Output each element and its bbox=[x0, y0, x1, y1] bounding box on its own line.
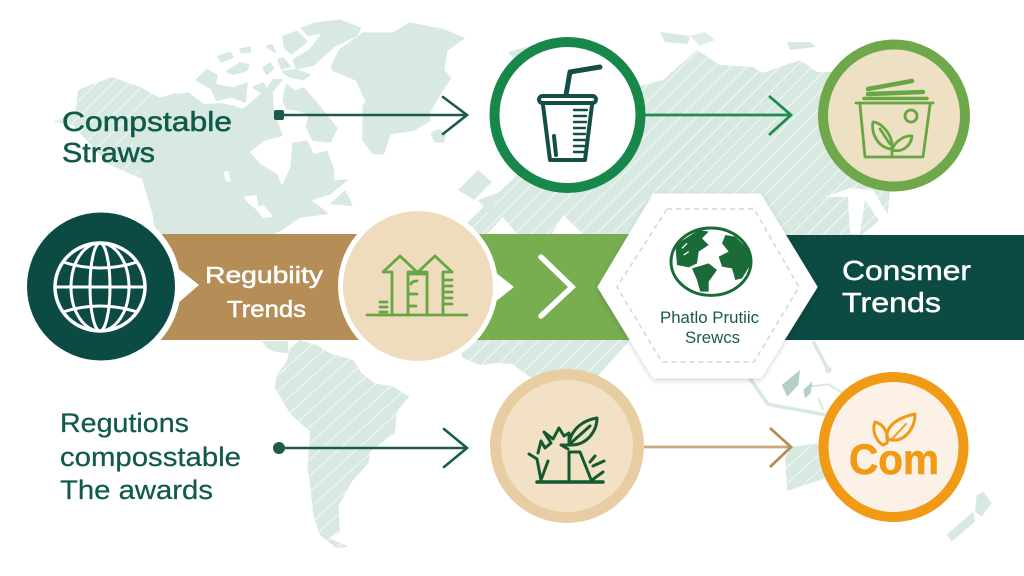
row label: Regutions: The awards bbox=[60, 475, 213, 505]
icon: earth bbox=[671, 228, 751, 295]
band text: Regubiity bbox=[205, 262, 324, 288]
arrow: top left bbox=[274, 97, 467, 134]
row label: Regutions: Regutions bbox=[60, 408, 189, 438]
globe badge bbox=[21, 206, 199, 366]
row label: Regutions: composstable bbox=[60, 442, 241, 472]
band text: Consmer bbox=[842, 255, 971, 286]
icon: plant sprout bbox=[529, 418, 604, 482]
chevron bbox=[541, 257, 572, 316]
arrow: bottom right bbox=[644, 428, 791, 467]
hexagon text: Phatlo Prutiic bbox=[660, 308, 759, 327]
icon circle: compost bin bbox=[823, 44, 965, 186]
icon: cup bbox=[539, 67, 600, 160]
map: cutouts bbox=[487, 188, 888, 234]
hexagon text bbox=[660, 308, 759, 347]
icon circle: straw cup bbox=[494, 42, 640, 188]
band text bbox=[842, 255, 971, 318]
map: Africa bbox=[455, 340, 630, 377]
map: Eurasia bbox=[467, 50, 890, 235]
map: Eurasia islands bbox=[458, 32, 816, 215]
icon circle: plant bbox=[490, 369, 644, 523]
dashed outline bbox=[617, 209, 799, 362]
main band: green bbox=[470, 234, 652, 340]
band text: Trends bbox=[842, 287, 941, 318]
hexagon text: Srewcs bbox=[685, 328, 740, 347]
icon circle: compostable bbox=[824, 377, 964, 517]
main band: regulatory trends bbox=[157, 234, 372, 340]
row label: Compstable Straws: Straws bbox=[62, 137, 155, 168]
icon: bin with leaves bbox=[856, 81, 933, 157]
map: South America bbox=[262, 340, 409, 548]
trends badge bbox=[338, 206, 514, 366]
map: North America bbox=[130, 21, 463, 233]
row label: Regutions bbox=[60, 408, 241, 505]
arrow: top right bbox=[645, 96, 791, 135]
band text bbox=[205, 262, 324, 322]
hexagon badge bbox=[599, 195, 816, 377]
icon: wireframe globe bbox=[55, 243, 145, 331]
main band: consumer trends bbox=[780, 235, 1024, 340]
map: Oceania bbox=[750, 342, 992, 542]
map: Alaska bbox=[53, 77, 240, 178]
icon: rising arrows bbox=[367, 256, 467, 315]
row label: Compstable Straws: Compstable bbox=[62, 106, 232, 137]
arrow: bottom left bbox=[273, 429, 467, 467]
band text: Trends bbox=[227, 296, 306, 322]
icon: orange leaves bbox=[874, 414, 915, 445]
row label: Compstable Straws bbox=[62, 106, 232, 168]
icon text: Com bbox=[849, 436, 939, 484]
